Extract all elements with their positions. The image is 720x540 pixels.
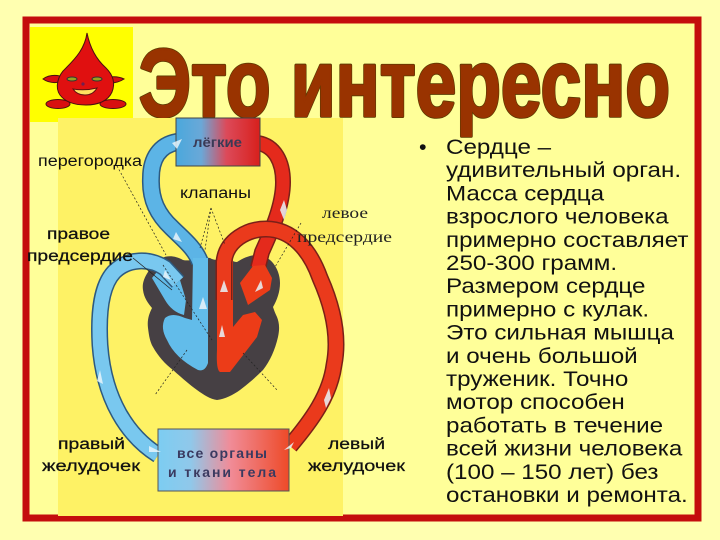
organs box: все органы <box>177 445 267 461</box>
text block: heart facts: Сердце – <box>446 134 551 159</box>
text block: heart facts: 250-300 грамм. <box>446 250 617 275</box>
left heart chambers <box>217 260 272 372</box>
lungs box <box>176 118 260 166</box>
label: перегородка: перегородка <box>38 153 142 170</box>
organs box: и ткани тела <box>168 464 276 480</box>
label: левое предсердие <box>297 205 392 246</box>
mascot panel <box>30 27 133 122</box>
label: клапаны: клапаны <box>180 185 251 202</box>
label: левое предсердие: левое <box>322 205 368 222</box>
blue vessel from lungs <box>151 142 200 262</box>
red aorta <box>224 229 336 446</box>
organs box <box>158 429 289 491</box>
text block: heart facts: и очень большой <box>446 343 638 367</box>
panel: circulation diagram <box>58 118 343 516</box>
leader lines <box>117 166 301 395</box>
label: левый желудочек: желудочек <box>308 458 405 475</box>
text block: heart facts: труженик. Точно <box>446 366 628 391</box>
text block: heart facts: работать в течение <box>446 413 663 437</box>
label: левый желудочек: левый <box>328 436 385 453</box>
text block: heart facts: (100 – 150 лет) без <box>446 459 659 483</box>
text block: heart facts: Размером сердце <box>446 273 645 298</box>
icon: blood drop mascot <box>43 33 126 108</box>
label: левое предсердие: предсердие <box>297 229 392 246</box>
red vessel from lungs <box>258 143 283 268</box>
text block: heart facts: всей жизни человека <box>446 436 683 460</box>
heart muscle <box>143 255 280 400</box>
text block: heart facts: взрослого человека <box>446 204 669 228</box>
text block: heart facts: мотор способен <box>446 389 625 414</box>
label: левый желудочек <box>308 436 405 475</box>
text block: heart facts <box>419 134 689 507</box>
text block: heart facts: Это сильная мышца <box>446 320 674 344</box>
text block: heart facts: примерно составляет <box>446 227 689 251</box>
label: правый желудочек: желудочек <box>42 458 140 475</box>
label: правое предсердие: предсердие <box>27 248 133 265</box>
label: правый желудочек: правый <box>58 436 125 453</box>
text block: heart facts: остановки и ремонта. <box>446 482 688 507</box>
text block: heart facts: удивительный орган. <box>446 157 681 182</box>
label: правый желудочек <box>42 436 140 475</box>
text block: heart facts: Масса сердца <box>446 181 604 205</box>
flow arrows <box>97 139 331 452</box>
blue vena cava <box>100 261 178 455</box>
text block: heart facts: примерно с кулак. <box>446 297 649 321</box>
text block: heart facts: • <box>419 135 427 159</box>
label: правое предсердие: правое <box>47 226 110 243</box>
right heart chambers <box>152 258 208 370</box>
label: правое предсердие <box>27 226 133 265</box>
lungs box: лёгкие <box>193 134 242 150</box>
